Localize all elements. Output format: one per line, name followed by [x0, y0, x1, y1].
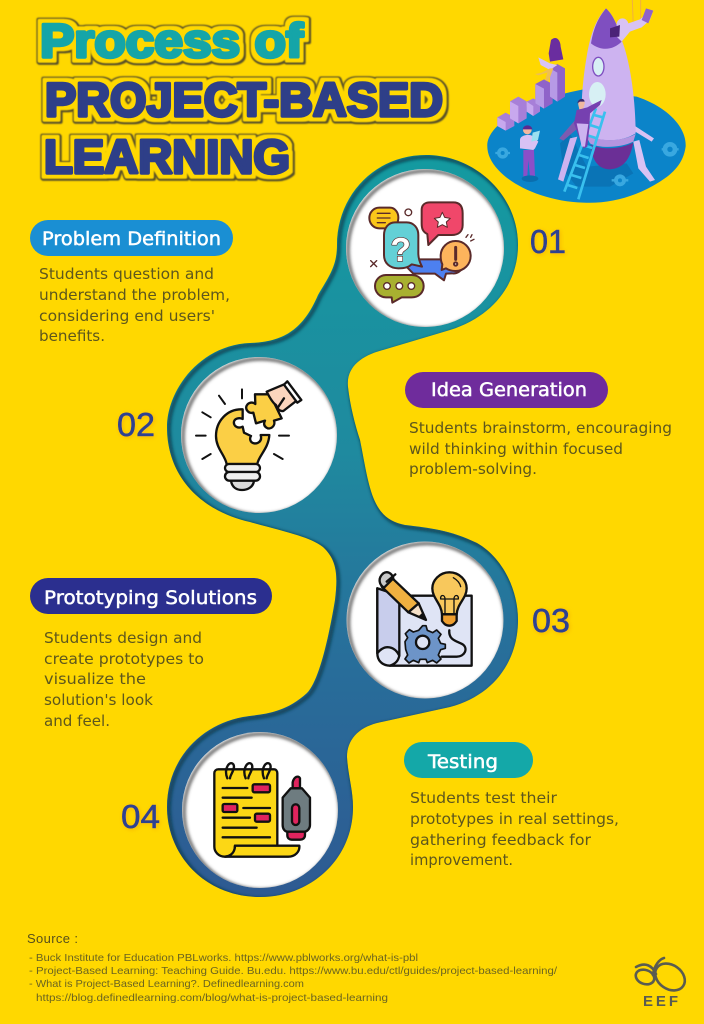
logo: EEF: EEF	[643, 993, 678, 1010]
icon: speech bubbles: ?	[390, 232, 411, 269]
rocket body	[581, 8, 636, 140]
description	[44, 629, 204, 730]
description	[39, 265, 230, 345]
description: considering end users'	[39, 307, 215, 325]
step 03 circle with design icon	[346, 542, 506, 700]
source list	[27, 931, 557, 1004]
description	[409, 419, 672, 478]
blue ground	[487, 89, 686, 203]
pill heading: Prototyping Solutions	[44, 587, 257, 609]
title	[40, 14, 443, 183]
title: PROJECT-BASED	[45, 73, 443, 126]
person on rope	[632, 0, 641, 27]
description: prototypes in real settings,	[410, 810, 619, 828]
step 04 circle with notes icon	[182, 732, 340, 890]
source list: Source :	[27, 931, 78, 946]
title: Process of	[40, 14, 303, 67]
description: and feel.	[44, 712, 110, 730]
panel: Problem Definition	[30, 220, 233, 345]
description: benefits.	[39, 327, 105, 345]
pill heading: Problem Definition	[42, 228, 221, 250]
description: create prototypes to	[44, 650, 204, 668]
ladder	[564, 108, 605, 199]
description: gathering feedback for	[410, 831, 592, 849]
description: Students question and	[39, 265, 214, 283]
description: Students brainstorm, encouraging	[409, 419, 672, 437]
pill heading: Testing	[427, 751, 498, 773]
pill heading	[405, 372, 608, 408]
pill heading	[30, 578, 272, 614]
bars	[497, 113, 514, 131]
description: improvement.	[410, 851, 513, 869]
step 01 circle with discussion icon	[346, 169, 506, 329]
number 02: 02	[117, 406, 155, 443]
illustration: rocket and team	[487, 0, 686, 203]
source list: - Project-Based Learning: Teaching Guide. Bu.edu. https://www.bu.edu/ctl/guides/project-based-learning/	[29, 965, 557, 977]
number 03: 03	[532, 602, 570, 639]
description: wild thinking within focused	[409, 440, 623, 458]
description: Students design and	[44, 629, 202, 647]
description: understand the problem,	[39, 286, 230, 304]
description	[410, 789, 619, 869]
pill heading: Idea Generation	[431, 379, 587, 401]
description: visualize the	[44, 670, 146, 688]
source list: - Buck Institute for Education PBLworks. https://www.pblworks.org/what-is-pbl	[29, 952, 418, 964]
panel: Testing	[404, 742, 619, 869]
logo: EEF	[634, 958, 690, 1010]
pill heading	[404, 742, 533, 778]
icon: blueprint, pencil, bulb and gear	[377, 572, 472, 666]
icon: speech bubbles	[369, 202, 474, 303]
person on ladder	[574, 100, 602, 148]
woman on bars	[549, 38, 563, 62]
source list: - What is Project-Based Learning?. Definedlearning.com	[29, 978, 304, 990]
step 02 circle with idea icon	[181, 357, 339, 515]
person with tablet	[520, 135, 538, 150]
description: solution's look	[44, 691, 153, 709]
icon: light bulb and puzzle	[196, 381, 301, 490]
source list: https://blog.definedlearning.com/blog/what-is-project-based-learning	[36, 992, 388, 1004]
description: Students test their	[410, 789, 558, 807]
panel: Idea Generation	[405, 372, 672, 478]
ribbon path	[167, 155, 520, 899]
title: LEARNING	[44, 130, 290, 183]
icon: notepad and marker	[214, 763, 310, 857]
number 01: 01	[530, 223, 566, 260]
description: problem-solving.	[409, 460, 537, 478]
pill heading	[30, 220, 233, 256]
panel: Prototyping Solutions	[30, 578, 272, 730]
number 04: 04	[121, 798, 160, 835]
rocket legs back	[559, 118, 582, 141]
